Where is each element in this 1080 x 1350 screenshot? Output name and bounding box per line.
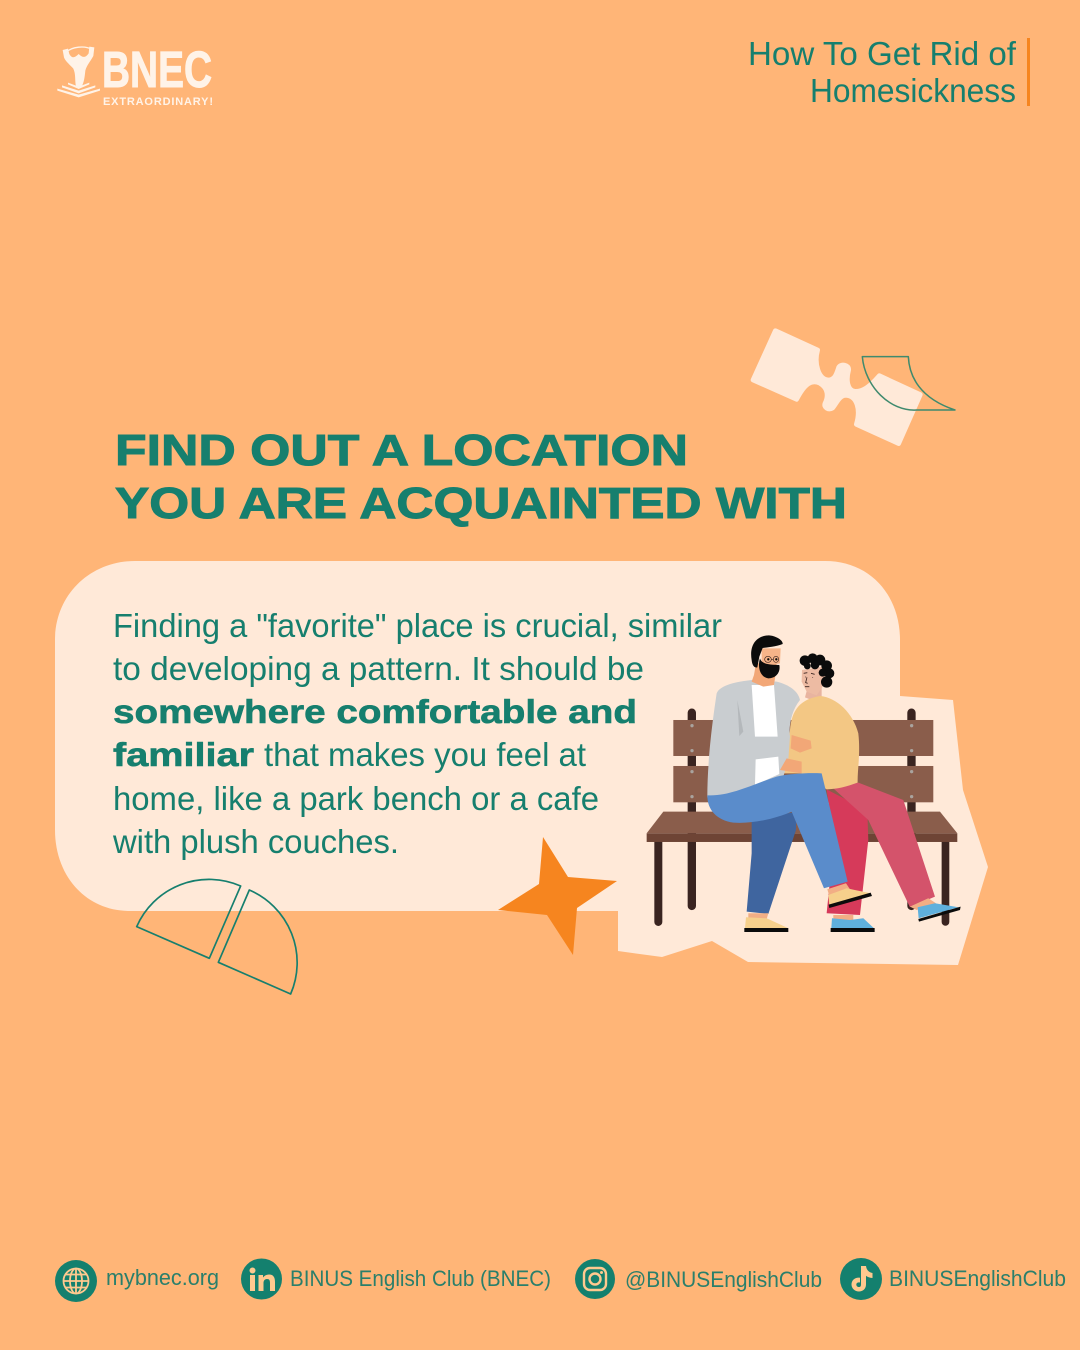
- body line 2: to developing a pattern. It should be: [113, 650, 644, 687]
- right quarter: [218, 890, 297, 994]
- icon: LinkedIn: [241, 1258, 282, 1300]
- contact: website: [55, 1260, 219, 1302]
- illustration: couple on a bench: [647, 635, 961, 932]
- logo wordmark: BNEC: [102, 41, 212, 98]
- icon: globe: [55, 1260, 97, 1302]
- icon: TikTok: [840, 1258, 882, 1300]
- contact: Instagram: [575, 1259, 822, 1299]
- body text: [112, 607, 722, 860]
- heading line 1: FIND OUT A LOCATION: [115, 426, 688, 475]
- body line 3 bold: somewhere comfortable and: [113, 693, 637, 730]
- left quarter: [137, 879, 241, 958]
- body line 4 bold part: familiar: [113, 736, 254, 773]
- series title line 2: Homesickness: [810, 72, 1016, 109]
- TikTok label: BINUSEnglishClub: [889, 1266, 1066, 1291]
- logo tagline: EXTRAORDINARY!: [103, 96, 213, 108]
- heading: [115, 426, 847, 528]
- website label: mybnec.org: [106, 1265, 219, 1290]
- series title: [748, 35, 1017, 109]
- icon: Instagram: [575, 1259, 615, 1299]
- body line 1: Finding a "favorite" place is crucial, similar: [113, 607, 722, 644]
- decoration: curled line shape: [862, 357, 955, 410]
- Instagram label: @BINUSEnglishClub: [625, 1267, 822, 1292]
- decoration: orange star: [498, 837, 617, 955]
- decoration: puzzle piece: [753, 331, 920, 444]
- decoration: split semicircle outline: [137, 879, 297, 994]
- body line 5: home, like a park bench or a cafe: [113, 780, 599, 817]
- contact: TikTok: [840, 1258, 1066, 1300]
- orange accent bar: [1027, 38, 1030, 106]
- series title line 1: How To Get Rid of: [748, 35, 1017, 72]
- body line 6: with plush couches.: [112, 823, 399, 860]
- logo: BNEC: [57, 41, 213, 108]
- bench: [647, 708, 957, 926]
- heading line 2: YOU ARE ACQUAINTED WITH: [115, 479, 847, 528]
- woman: [783, 653, 961, 932]
- body line 4 regular part: that makes you feel at: [264, 736, 586, 773]
- logo icon: figure and book: [57, 47, 100, 97]
- man: [707, 635, 872, 932]
- LinkedIn label: BINUS English Club (BNEC): [290, 1266, 551, 1291]
- contact: LinkedIn: [241, 1258, 551, 1300]
- panel: cream speech shape and torn paper: [55, 561, 988, 965]
